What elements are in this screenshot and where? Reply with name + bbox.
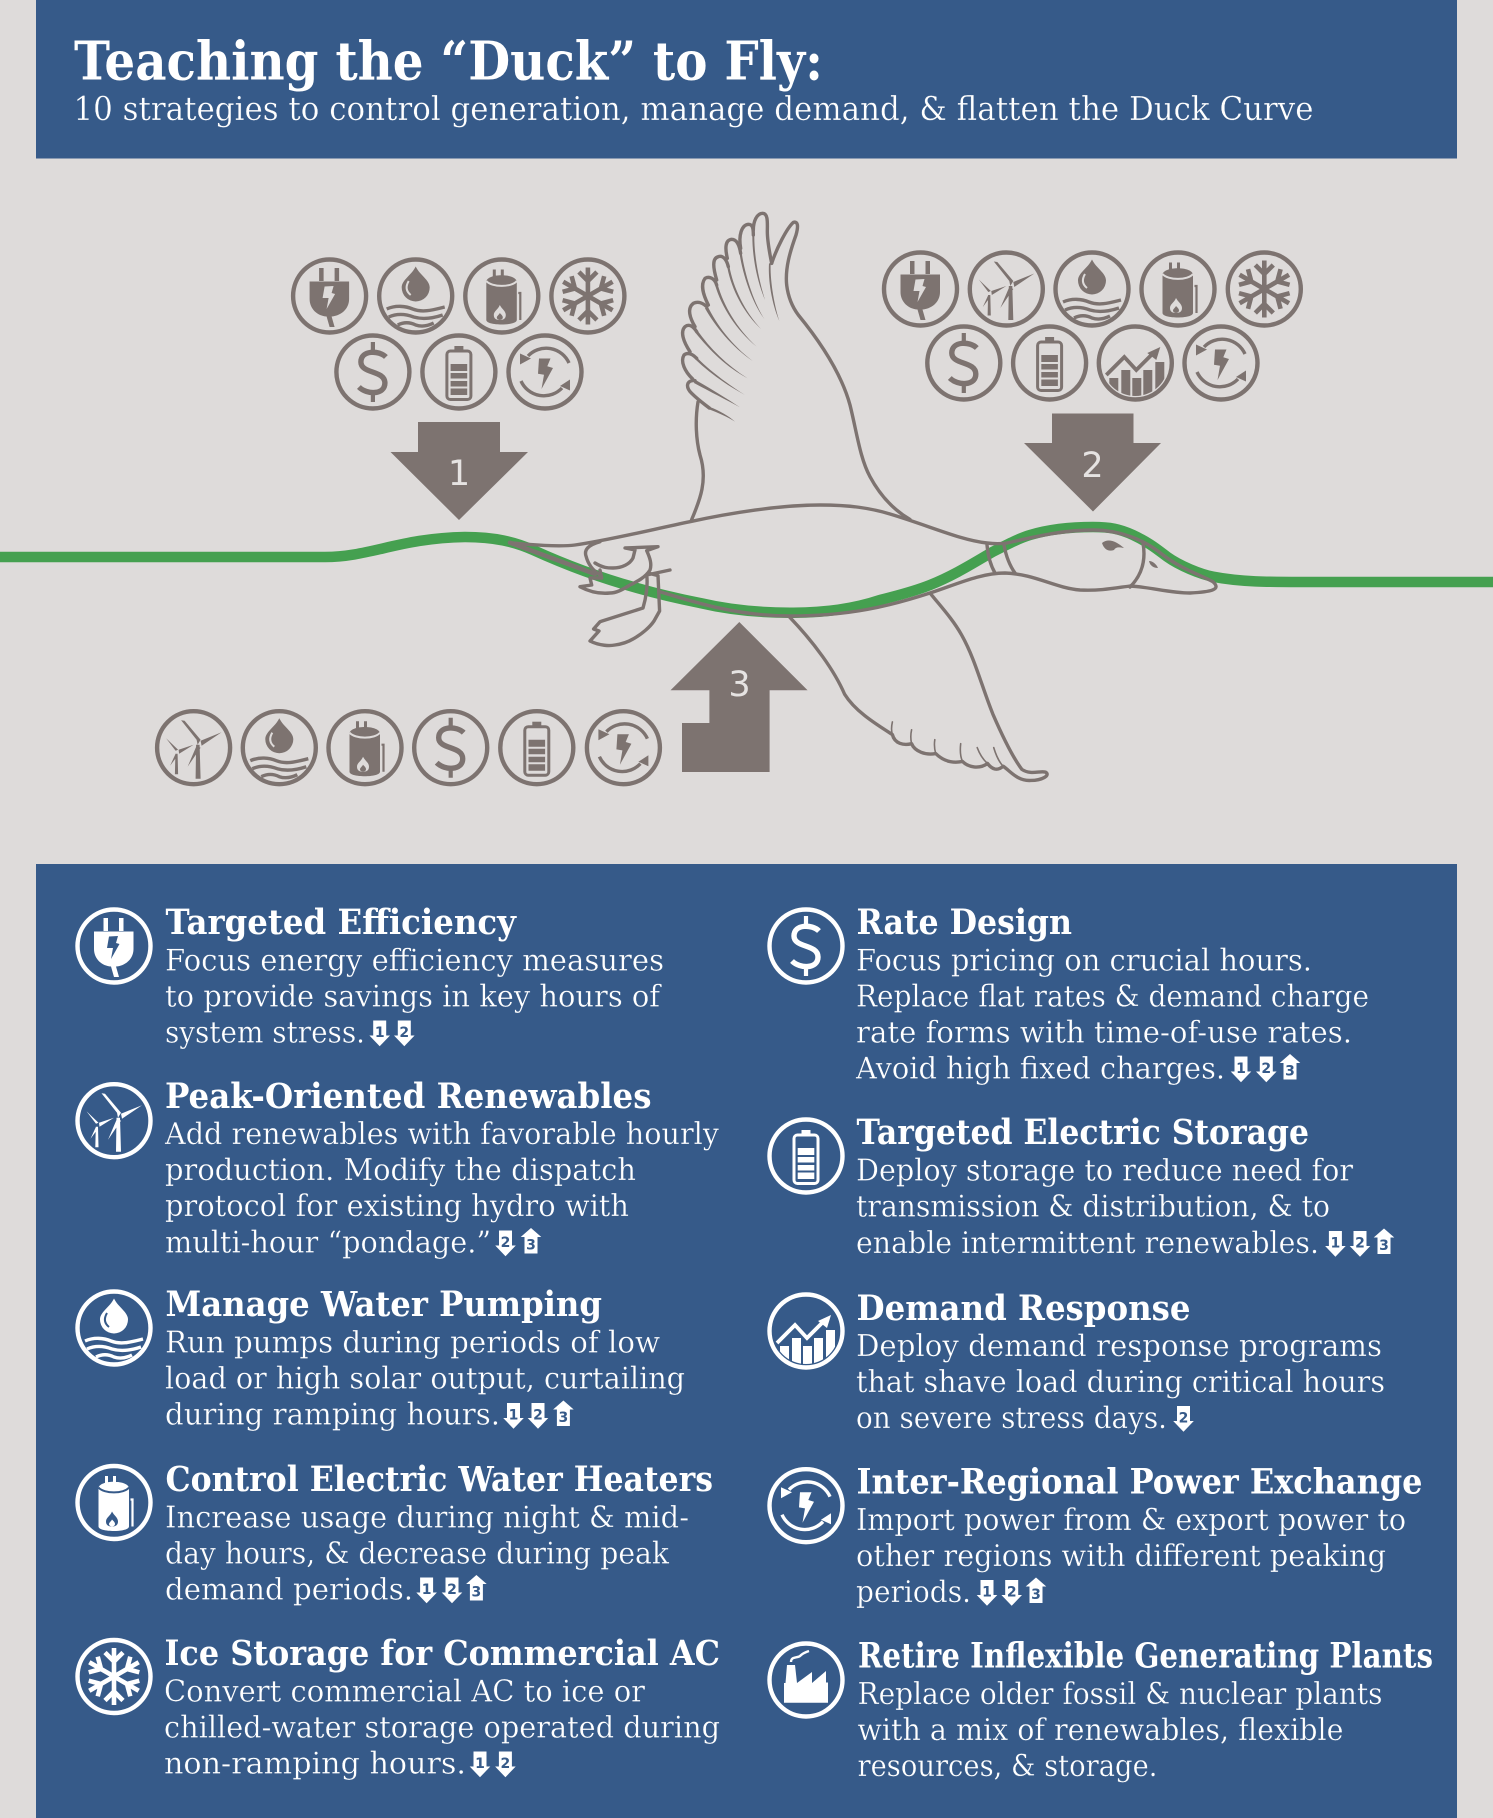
strategy: Control Electric Water Heaters: Increase usage during night & mid- [165, 1500, 689, 1536]
icon: wind turbines [157, 711, 230, 784]
strategy: Peak-Oriented Renewables: protocol for existing hydro with [165, 1189, 629, 1224]
strategy: Manage Water Pumping: 2 [533, 1408, 543, 1424]
icon: exchange [587, 711, 660, 784]
strategy: Targeted Electric Storage: 3 [1379, 1238, 1389, 1254]
strategy: Retire Inflexible Generating Plants [770, 1636, 1433, 1784]
strategy: Targeted Electric Storage: 2 [1355, 1236, 1365, 1252]
icon: wind turbines [78, 1084, 150, 1157]
strategy: Ice Storage for Commercial AC: 2 [501, 1756, 510, 1772]
duck body and head [510, 505, 1216, 616]
icon: water [1056, 252, 1128, 326]
strategy: Rate Design: 2 [1261, 1061, 1271, 1077]
strategy: Rate Design: Focus pricing on crucial hours. [856, 944, 1312, 978]
green net load curve [0, 527, 1493, 613]
strategy: Manage Water Pumping: during ramping hours. [165, 1398, 500, 1432]
icon: exchange [508, 336, 582, 408]
strategy: Retire Inflexible Generating Plants: with a mix of renewables, flexible [858, 1713, 1344, 1748]
strategy: Control Electric Water Heaters: 1 [422, 1582, 431, 1598]
strategy: Peak-Oriented Renewables: Peak-Oriented Renewables [165, 1076, 652, 1117]
icon: plug [884, 252, 957, 326]
icon row beside arrow 3 [157, 711, 660, 784]
strategy: Rate Design [770, 902, 1369, 1086]
strategy: Retire Inflexible Generating Plants: resources, & storage. [858, 1749, 1158, 1784]
tail line [510, 543, 595, 574]
strategies panel [36, 864, 1457, 1818]
strategy: Rate Design: 3 [1285, 1064, 1295, 1080]
arrow 3 [670, 622, 808, 772]
arrow 3: 3 [728, 665, 751, 705]
icon: wind turbines [970, 252, 1043, 326]
header banner [36, 0, 1457, 158]
icon: exchange [1184, 326, 1258, 400]
strategy: Rate Design: Rate Design [856, 902, 1072, 943]
neck rings and head divider [987, 543, 1144, 587]
duck illustration [510, 213, 1216, 780]
strategy: Inter-Regional Power Exchange: 1 [982, 1584, 992, 1600]
strategy: Targeted Electric Storage: 1 [1331, 1236, 1340, 1252]
icon cluster above arrow 1 [293, 260, 624, 408]
icon: snowflake [1228, 252, 1301, 326]
icon: battery [422, 336, 495, 408]
strategy: Targeted Efficiency: 1 [375, 1025, 385, 1041]
icon: heater [465, 260, 538, 332]
strategy: Peak-Oriented Renewables [78, 1076, 719, 1260]
strategy: Rate Design: rate forms with time-of-use rates. [856, 1016, 1352, 1050]
strategy: Peak-Oriented Renewables: 2 [501, 1235, 510, 1251]
strategy: Targeted Efficiency: Targeted Efficiency [166, 902, 518, 943]
strategy: Targeted Efficiency: 2 [399, 1025, 409, 1041]
subtitle: 10 strategies to control generation, manage demand, & flatten the Duck Curve [74, 89, 1314, 128]
icon: battery [770, 1120, 842, 1192]
strategy: Control Electric Water Heaters: demand periods. [165, 1572, 413, 1608]
strategy: Ice Storage for Commercial AC [78, 1633, 720, 1782]
strategy: Demand Response [770, 1288, 1385, 1436]
strategy: Peak-Oriented Renewables: production. Modify the dispatch [165, 1153, 636, 1188]
icon: demand chart [770, 1294, 842, 1368]
strategy: Peak-Oriented Renewables: Add renewables with favorable hourly [164, 1117, 719, 1152]
strategy: Inter-Regional Power Exchange: Inter-Regional Power Exchange [856, 1462, 1422, 1502]
icon: plug [293, 260, 366, 332]
icon: dollar [336, 336, 409, 408]
strategy: Ice Storage for Commercial AC: Convert commercial AC to ice or [164, 1674, 646, 1710]
icon: demand chart [1099, 326, 1172, 400]
strategy: Control Electric Water Heaters: day hours, & decrease during peak [165, 1536, 670, 1572]
strategy: Targeted Efficiency [78, 902, 664, 1050]
icon cluster above arrow 2 [884, 252, 1301, 400]
strategy: Rate Design: Avoid high fixed charges. [855, 1052, 1225, 1086]
strategy: Targeted Efficiency: Focus energy efficiency measures [165, 944, 664, 978]
icon: heater [1142, 252, 1214, 326]
strategy: Control Electric Water Heaters [78, 1459, 713, 1608]
raised wing [683, 213, 910, 519]
strategy: Demand Response: 2 [1179, 1410, 1188, 1426]
icon: exchange [770, 1469, 842, 1542]
strategy: Ice Storage for Commercial AC: chilled-water storage operated during [164, 1710, 720, 1746]
duck upper foot [580, 542, 658, 593]
duck lower foot [590, 570, 670, 646]
eye and nostril [1102, 541, 1158, 568]
strategy: Demand Response: Demand Response [856, 1288, 1190, 1329]
strategy: Manage Water Pumping: Manage Water Pumping [166, 1284, 602, 1325]
strategy: Manage Water Pumping: load or high solar output, curtailing [165, 1362, 685, 1396]
lower wing [790, 593, 1047, 780]
icon: plug [78, 910, 150, 982]
strategy: Inter-Regional Power Exchange: other regions with different peaking [856, 1539, 1386, 1574]
strategy: Targeted Electric Storage: transmission & distribution, & to [856, 1190, 1330, 1224]
icon: dollar [770, 910, 842, 982]
icon: factory [770, 1644, 842, 1716]
icon: snowflake [78, 1640, 150, 1713]
arrow 1 [390, 422, 528, 520]
strategy: Targeted Electric Storage: Targeted Electric Storage [856, 1112, 1309, 1153]
strategy: Control Electric Water Heaters: 2 [447, 1582, 457, 1598]
strategy: Targeted Electric Storage: enable intermittent renewables. [856, 1226, 1319, 1261]
strategy: Manage Water Pumping [78, 1284, 685, 1432]
icon: dollar [927, 326, 1000, 400]
icon: water [243, 711, 316, 784]
strategy: Manage Water Pumping: Run pumps during periods of low [165, 1326, 660, 1360]
strategy: Peak-Oriented Renewables: 3 [526, 1238, 536, 1254]
strategy: Targeted Efficiency: system stress. [165, 1016, 365, 1050]
icon: snowflake [551, 260, 624, 332]
strategy: Targeted Electric Storage: Deploy storage to reduce need for [856, 1154, 1354, 1188]
icon: battery [1013, 326, 1086, 400]
icon: battery [500, 711, 573, 784]
strategy: Demand Response: Deploy demand response programs [856, 1329, 1382, 1364]
strategy: Targeted Electric Storage [770, 1112, 1394, 1261]
icon: water [379, 260, 452, 332]
strategy: Control Electric Water Heaters: Control Electric Water Heaters [166, 1459, 713, 1500]
strategy: Ice Storage for Commercial AC: 1 [475, 1756, 485, 1772]
icon: heater [78, 1466, 150, 1539]
strategy: Control Electric Water Heaters: 3 [472, 1584, 481, 1600]
strategy: Demand Response: that shave load during critical hours [856, 1365, 1385, 1400]
strategy: Ice Storage for Commercial AC: non-ramping hours. [164, 1746, 466, 1782]
strategy: Retire Inflexible Generating Plants: Replace older fossil & nuclear plants [858, 1677, 1382, 1712]
arrow 1: 1 [448, 454, 470, 494]
strategy: Manage Water Pumping: 1 [509, 1408, 518, 1424]
strategy: Demand Response: on severe stress days. [856, 1401, 1167, 1436]
strategy: Rate Design: Replace flat rates & demand charge [856, 980, 1369, 1014]
strategy: Peak-Oriented Renewables: multi-hour “pondage.” [165, 1226, 491, 1260]
icon: water [78, 1292, 150, 1364]
wing trailing edge [692, 402, 703, 520]
arrow 2 [1024, 414, 1161, 512]
strategy: Inter-Regional Power Exchange: Import power from & export power to [856, 1503, 1406, 1538]
icon: heater [328, 711, 402, 784]
strategy: Inter-Regional Power Exchange: 3 [1031, 1587, 1041, 1603]
strategy: Ice Storage for Commercial AC: Ice Storage for Commercial AC [164, 1633, 720, 1674]
strategy: Targeted Efficiency: to provide savings in key hours of [165, 980, 662, 1014]
title: Teaching the “Duck” to Fly: [74, 30, 823, 92]
strategy: Inter-Regional Power Exchange [770, 1462, 1422, 1610]
strategy: Rate Design: 1 [1236, 1061, 1246, 1077]
arrow 2: 2 [1081, 446, 1104, 486]
strategy: Manage Water Pumping: 3 [559, 1410, 568, 1426]
strategy: Inter-Regional Power Exchange: periods. [856, 1575, 971, 1610]
strategy: Inter-Regional Power Exchange: 2 [1007, 1584, 1017, 1600]
icon: dollar [414, 711, 487, 784]
